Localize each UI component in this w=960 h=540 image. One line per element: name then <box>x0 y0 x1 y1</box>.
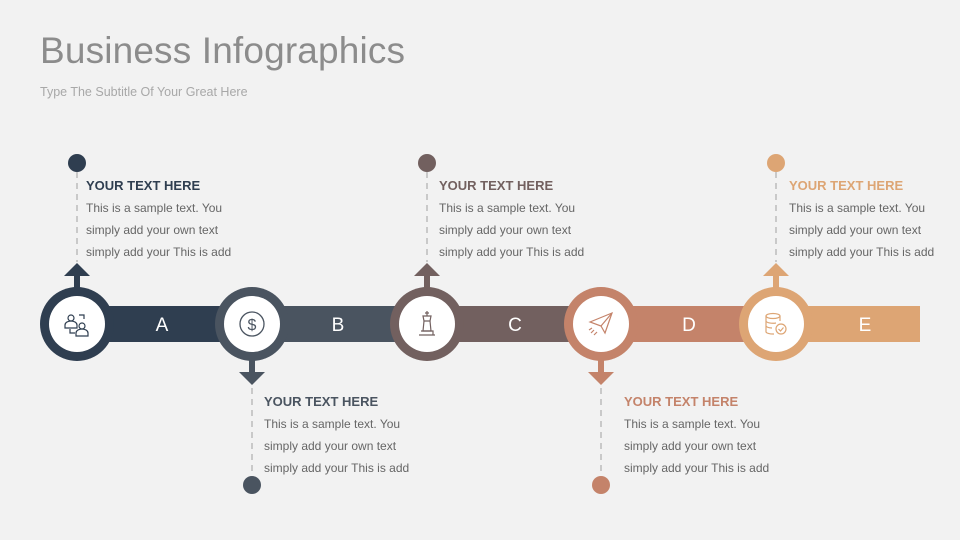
step A: simply add your This is add <box>86 245 231 259</box>
step B: This is a sample text. You <box>264 417 400 431</box>
timeline band: D <box>682 315 696 336</box>
step D: This is a sample text. You <box>624 417 760 431</box>
step C: simply add your This is add <box>439 245 584 259</box>
step C: YOUR TEXT HERE <box>439 178 553 193</box>
step D: simply add your own text <box>624 439 757 453</box>
step B: simply add your own text <box>264 439 397 453</box>
step E: This is a sample text. You <box>789 201 925 215</box>
timeline band <box>77 306 920 342</box>
step D <box>564 287 769 494</box>
step B <box>215 287 409 494</box>
step B: YOUR TEXT HERE <box>264 394 378 409</box>
step D: simply add your This is add <box>624 461 769 475</box>
step C <box>390 154 584 361</box>
step E <box>739 154 934 361</box>
step B: simply add your This is add <box>264 461 409 475</box>
step E: simply add your own text <box>789 223 922 237</box>
timeline band: E <box>859 315 871 336</box>
step A: simply add your own text <box>86 223 219 237</box>
step A: YOUR TEXT HERE <box>86 178 200 193</box>
step A: This is a sample text. You <box>86 201 222 215</box>
step D: YOUR TEXT HERE <box>624 394 738 409</box>
timeline band: C <box>508 315 522 336</box>
step E: YOUR TEXT HERE <box>789 178 903 193</box>
step C: This is a sample text. You <box>439 201 575 215</box>
title: Business Infographics <box>40 30 405 71</box>
step E: simply add your This is add <box>789 245 934 259</box>
step C: simply add your own text <box>439 223 572 237</box>
timeline band: A <box>156 315 169 336</box>
subtitle: Type The Subtitle Of Your Great Here <box>40 85 248 99</box>
step A <box>40 154 231 361</box>
step B: $ <box>248 317 257 334</box>
timeline band: B <box>332 315 344 336</box>
